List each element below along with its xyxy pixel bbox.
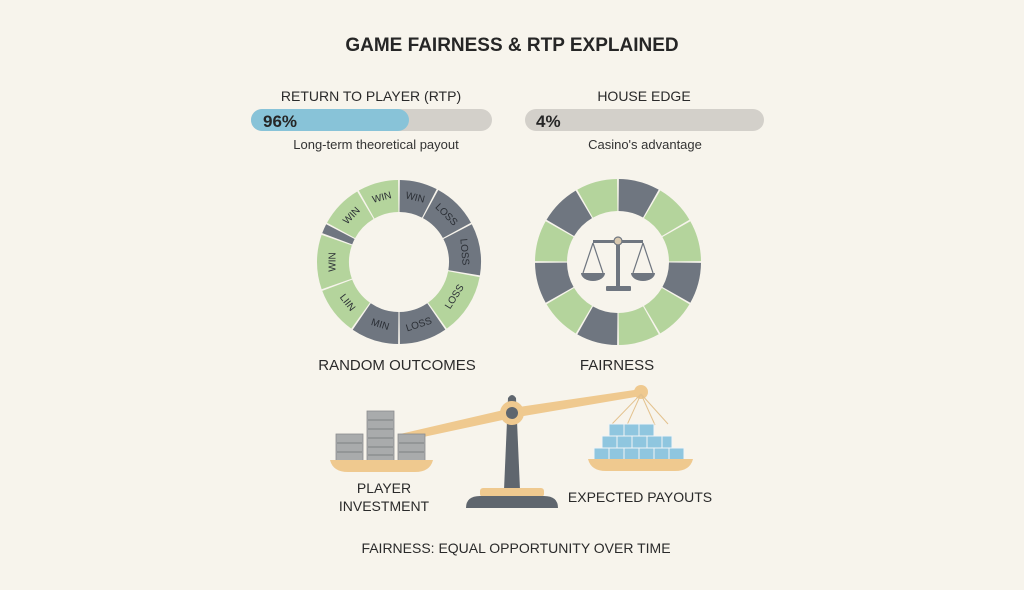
label: player investment: PLAYER — [357, 480, 411, 496]
panel: house edge — [525, 88, 764, 152]
chart: random outcomes wheel: MIN — [370, 317, 390, 333]
scale post — [504, 395, 520, 490]
title: GAME FAIRNESS & RTP EXPLAINED — [345, 35, 679, 56]
label: fairness: FAIRNESS — [580, 357, 654, 374]
text: INVESTMENT — [339, 498, 430, 514]
chart: random outcomes wheel: LIIN — [337, 292, 357, 314]
chart: random outcomes wheel: LOSS — [457, 238, 471, 266]
chart: random outcomes wheel: WIN — [371, 190, 393, 206]
chart: random outcomes wheel — [307, 170, 491, 354]
chart: random outcomes wheel: WIN — [341, 205, 363, 227]
right pan with payout blocks — [588, 394, 693, 471]
bar: house edge — [525, 109, 764, 131]
chart: random outcomes wheel: LOSS — [443, 282, 467, 311]
heading: house edge: HOUSE EDGE — [597, 88, 691, 104]
chart: fairness wheel — [526, 170, 710, 354]
beam — [400, 389, 641, 442]
bar: house edge: 4% — [536, 112, 561, 131]
illustration: balance scale — [330, 385, 693, 508]
label: expected payouts: EXPECTED PAYOUTS — [568, 489, 712, 505]
panel: RTP — [251, 88, 492, 152]
caption: RTP: Long-term theoretical payout — [293, 137, 459, 152]
icon: balance scale — [581, 237, 655, 291]
bar: RTP — [251, 109, 492, 131]
label: random outcomes: RANDOM OUTCOMES — [318, 357, 476, 374]
bar: RTP: 96% — [263, 112, 297, 131]
caption: house edge: Casino's advantage — [588, 137, 702, 152]
chart: random outcomes wheel: WIN — [404, 190, 426, 206]
footer tagline: FAIRNESS: EQUAL OPPORTUNITY OVER TIME — [361, 540, 671, 556]
chart: random outcomes wheel: LOSS — [433, 202, 460, 229]
left pan with coin stacks — [330, 411, 433, 472]
chart: random outcomes wheel: LOSS — [405, 316, 434, 334]
chart: random outcomes wheel: WIN — [328, 252, 338, 272]
heading: RTP: RETURN TO PLAYER (RTP) — [281, 88, 461, 104]
